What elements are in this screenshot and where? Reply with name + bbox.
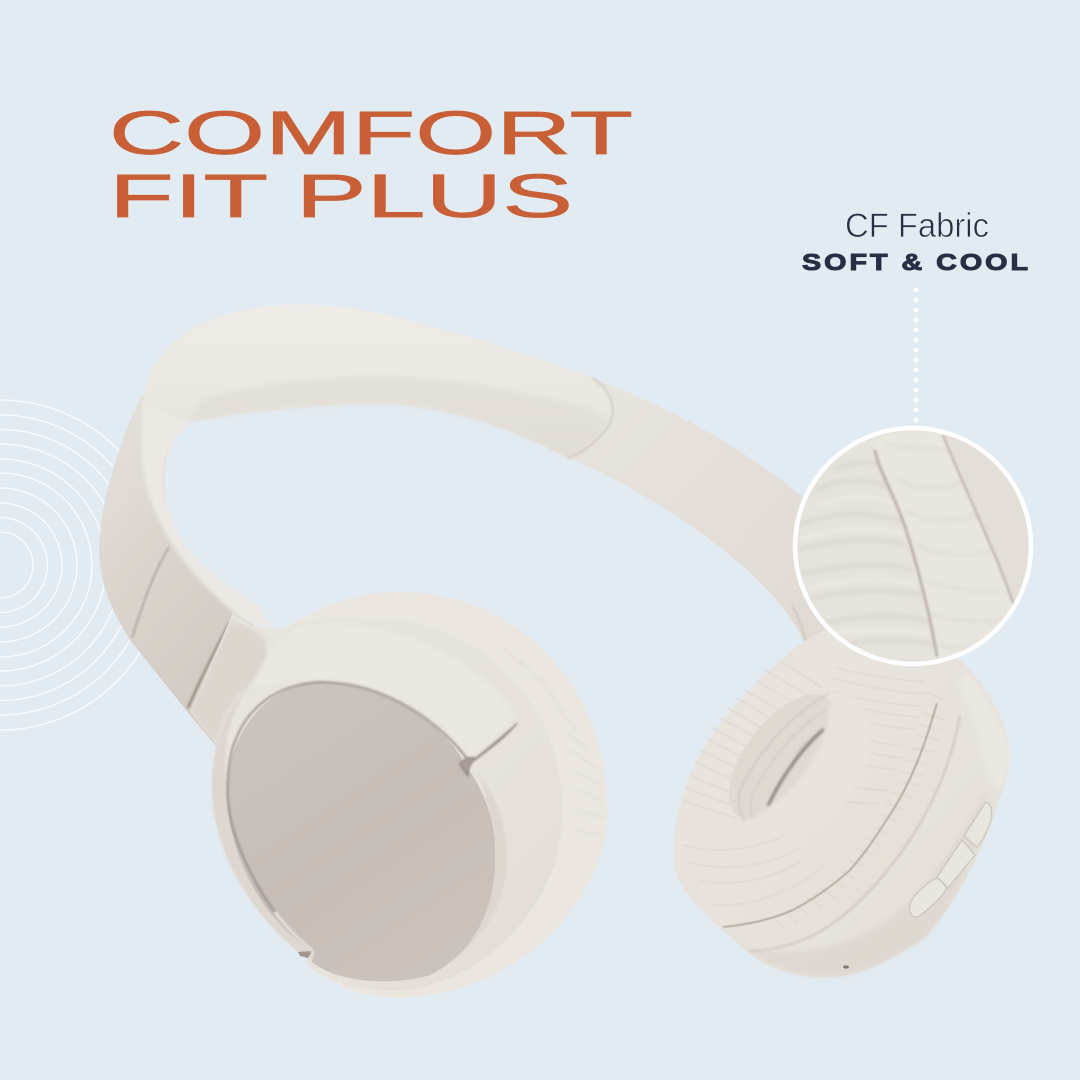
left cup lower lip (275, 912, 360, 985)
right ear cup (673, 629, 1010, 977)
top padded band (142, 304, 613, 460)
right cup cushion (673, 629, 960, 951)
right cup cushion wrinkles (682, 660, 946, 930)
flat right surface (943, 430, 1035, 620)
fabric second seam line (943, 435, 1013, 603)
left cup notch (460, 723, 517, 776)
left cup rim shading (212, 692, 507, 980)
left cup cushion (285, 592, 607, 998)
dotted callout connector (914, 288, 918, 422)
title: FIT PLUS (109, 162, 573, 230)
left cup collar highlight (250, 624, 515, 758)
right cup cushion overlap (742, 692, 870, 835)
right cup lower shading (742, 790, 985, 977)
left arm lower tone (190, 620, 267, 745)
right cup housing seam (750, 715, 960, 951)
headband right section (568, 378, 830, 645)
light ridge (875, 429, 1013, 665)
left cup top groove (228, 682, 468, 912)
band hinge crease (132, 547, 169, 638)
callout name: CF Fabric (845, 207, 989, 245)
zoomed fabric photo (793, 426, 1035, 666)
fabric wrinkles left (932, 644, 933, 645)
circle white outline (795, 428, 1031, 664)
arm hinge crease (188, 622, 230, 708)
headband left and top section (99, 304, 613, 748)
outer band surface (99, 395, 270, 748)
fabric highlights left (800, 498, 930, 635)
inner light strip (141, 400, 275, 632)
right cup microphone hole (843, 965, 849, 969)
callout label (802, 207, 1031, 275)
infographic canvas (0, 110, 1034, 998)
right cup highlight panel (960, 672, 1010, 790)
fabric wrinkles ridge (885, 445, 1008, 647)
title: COMFORT (109, 99, 633, 167)
lower pad shading (190, 377, 608, 458)
decorative concentric rings (0, 400, 165, 730)
callout descriptor: SOFT & COOL (802, 249, 1031, 275)
left cup cushion wrinkles (505, 650, 604, 836)
magnified fabric circle (793, 426, 1035, 666)
right cup ear hole (708, 676, 858, 838)
fabric seam line (875, 450, 937, 657)
right cup housing (722, 640, 1009, 977)
left ear cup (190, 592, 607, 998)
left cup face plate (227, 682, 495, 981)
title (109, 99, 633, 230)
right cup control buttons (909, 802, 992, 917)
pad end crease (568, 378, 613, 458)
right cup seam (723, 703, 937, 927)
left cup housing (190, 613, 562, 991)
left cup bottom slot (298, 948, 315, 958)
